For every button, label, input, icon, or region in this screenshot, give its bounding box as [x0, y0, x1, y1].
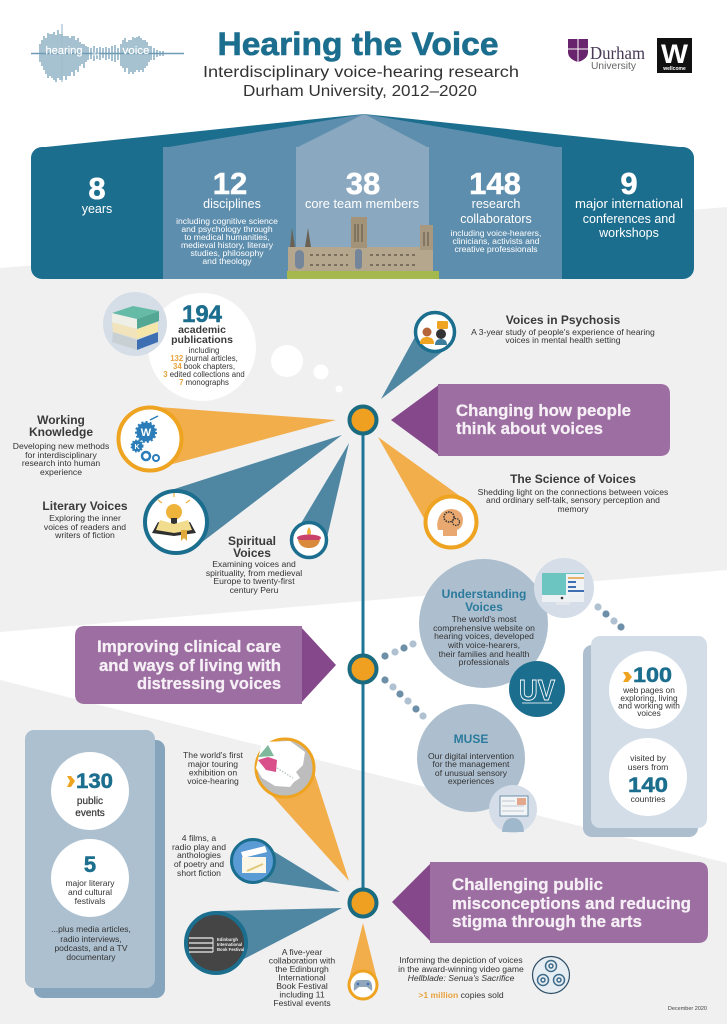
logo: hearing the voice waveform: voice: [122, 45, 150, 57]
panel: public events: 130: [76, 770, 113, 793]
banner: Challenging public misconceptions: misconceptions and reducing: [452, 895, 691, 913]
text: Literary Voices: writers of fiction: [54, 530, 115, 540]
panel: web statistics: web pages on: [622, 685, 675, 695]
beam and icon: Edinburgh International Book Festival: International: [217, 942, 242, 947]
text: Hellblade video game: Hellblade: Senua's Sacrifice: [408, 973, 515, 983]
stat: 12 disciplines: 12: [213, 166, 247, 201]
panel: MUSE: MUSE: [454, 732, 488, 746]
text: Spiritual Voices: Voices: [233, 546, 271, 560]
text: Working Knowledge: research into human: [22, 458, 100, 468]
text: Spiritual Voices: Europe to twenty-first: [213, 576, 295, 586]
text: Edinburgh collaboration: [269, 947, 335, 1008]
beam and icon: films: [232, 840, 340, 892]
panel: public events: festivals: [75, 896, 105, 906]
text: Spiritual Voices: Examining voices and: [212, 559, 296, 569]
icon: MUSE tablet: [489, 785, 537, 833]
panel: Understanding Voices: with voice-hearers,: [447, 640, 520, 650]
date note: December 2020: [668, 1006, 707, 1012]
stat: 9 conferences: 9: [620, 166, 638, 201]
text: Hellblade video game: [398, 955, 524, 1000]
text: Hellblade video game: >1 million copies sold: [418, 990, 504, 1000]
text: The Science of Voices: Shedding light on the connections between voices: [478, 487, 668, 497]
stat: 12 disciplines: to medical humanities,: [184, 232, 270, 242]
stat: 8 years: [82, 171, 112, 216]
text: The Science of Voices: and ordinary self-talk, sensory perception and: [486, 495, 660, 505]
panel: public events: [25, 730, 165, 998]
stat: 38 core team members: core team members: [305, 197, 419, 211]
beam and icon: Edinburgh International Book Festival: Edinburgh: [217, 937, 238, 942]
stat: 12 disciplines: [176, 166, 278, 266]
timeline spine: [362, 420, 364, 905]
subtitle: [203, 64, 519, 100]
stat: 148 research collaborators: [451, 166, 541, 254]
panel: public events: events: [75, 808, 105, 819]
text: touring exhibition: [183, 750, 244, 786]
stat: 148 research collaborators: research: [472, 197, 520, 211]
panel: web statistics: 100: [633, 664, 672, 687]
panel: web statistics: voices: [637, 708, 661, 718]
stat: 148 research collaborators: 148: [469, 166, 521, 201]
beam and icon: touring exhibition: [256, 739, 349, 881]
panel: public events: podcasts, and a TV: [54, 943, 128, 953]
icon: Hellblade triskele: [532, 956, 570, 994]
panel: web statistics: [583, 636, 707, 837]
text: Voices in Psychosis: Voices in Psychosis: [506, 313, 621, 327]
panel: web statistics: visited by: [630, 753, 667, 763]
beam and icon: Working Knowledge: W: [141, 427, 152, 439]
panel: public events: major literary: [65, 878, 115, 888]
stat: 9 conferences: major international: [575, 197, 683, 211]
stat: 38 core team members: [305, 166, 419, 211]
beam and icon: Working Knowledge: [118, 407, 336, 470]
panel: public events: ...plus media articles,: [51, 924, 131, 934]
text: films: anthologies: [177, 850, 221, 860]
beam and icon: The Science of Voices: [378, 437, 476, 548]
panel: Understanding Voices: professionals: [459, 657, 509, 667]
banner: Changing how people think about voices: think about voices: [456, 420, 603, 438]
stat: 38 core team members: 38: [346, 166, 380, 201]
subtitle: Interdisciplinary voice-hearing research: [203, 64, 519, 81]
banner: Challenging public misconceptions: stigma through the arts: [452, 913, 642, 931]
text: The Science of Voices: [478, 472, 668, 514]
icon: UV logo: UV: [519, 675, 556, 707]
logo: hearing the voice waveform: the: [93, 52, 100, 58]
text: Spiritual Voices: Spiritual: [228, 534, 276, 548]
text: Literary Voices: [42, 499, 128, 540]
beam and icon: Spiritual Voices: [292, 443, 349, 558]
panel: MUSE: for the management: [433, 759, 510, 769]
banner: Improving clinical care: Improving clinical care: [97, 638, 281, 656]
text: Voices in Psychosis: voices in mental health setting: [505, 335, 621, 345]
title: Hearing the Voice: [218, 26, 498, 62]
stat: 148 research collaborators: including voice-hearers,: [451, 228, 541, 238]
stat: 9 conferences: [575, 166, 683, 240]
panel: MUSE: Our digital intervention: [428, 751, 514, 761]
publications thought bubble: [103, 292, 342, 401]
logo: Durham University: University: [591, 60, 637, 72]
text: The Science of Voices: The Science of Voices: [510, 472, 636, 486]
text: films: radio play and: [172, 842, 226, 852]
text: Edinburgh collaboration: A five-year: [282, 947, 322, 957]
text: Voices in Psychosis: A 3-year study of people's experience of hearing: [471, 327, 655, 337]
stat: 148 research collaborators: collaborators: [460, 212, 532, 226]
banner: Improving clinical care: [75, 626, 336, 704]
panel: web statistics: users from: [628, 762, 668, 772]
text: films: of poetry and: [174, 859, 224, 869]
panel: Understanding Voices: Understanding: [442, 587, 526, 601]
text: touring exhibition: voice-hearing: [187, 776, 239, 786]
publications thought bubble: publications: [171, 334, 233, 346]
stat: 12 disciplines: medieval history, literary: [181, 240, 274, 250]
panel: MUSE: [417, 704, 525, 812]
text: Edinburgh collaboration: Festival events: [273, 998, 331, 1008]
publications thought bubble: 194: [182, 301, 223, 328]
text: Edinburgh collaboration: including 11: [279, 990, 325, 1000]
logo: Wellcome: W: [661, 39, 689, 69]
text: Working Knowledge: for interdisciplinary: [25, 450, 98, 460]
logo: hearing the voice waveform: hearing: [46, 45, 82, 57]
dotted connector: to Understanding Voices: [381, 640, 417, 660]
panel: public events: radio interviews,: [60, 934, 122, 944]
text: Working Knowledge: Knowledge: [29, 425, 93, 439]
text: The Science of Voices: memory: [557, 504, 589, 514]
panel: Understanding Voices: their families and health: [439, 649, 530, 659]
text: Working Knowledge: Working: [37, 413, 85, 427]
panel: web statistics: 140: [628, 774, 668, 797]
panel: web statistics: and working with: [618, 700, 680, 710]
stat: 12 disciplines: studies, philosophy: [190, 248, 264, 258]
logo: Durham University: [568, 39, 645, 72]
panel: MUSE: experiences: [448, 776, 494, 786]
stat: 12 disciplines: disciplines: [203, 197, 261, 211]
text: Voices in Psychosis: [471, 313, 655, 345]
text: touring exhibition: The world's first: [183, 750, 244, 760]
icon: stack of books: [112, 306, 159, 350]
text: Edinburgh collaboration: collaboration with: [269, 956, 335, 966]
banner: Changing how people think about voices: Changing how people: [456, 402, 631, 420]
stat: 8 years: 8: [88, 171, 106, 206]
panel: public events: documentary: [66, 952, 116, 962]
icon: website monitor: [534, 558, 594, 618]
panel: public events: and cultural: [68, 887, 112, 897]
text: films: [172, 833, 226, 878]
publications thought bubble: 7 monographs: [179, 378, 229, 387]
publications thought bubble: 3 edited collections and: [163, 370, 245, 379]
banner: Challenging public misconceptions: [392, 862, 708, 943]
publications thought bubble: academic: [178, 324, 226, 336]
banner: Changing how people think about voices: [391, 384, 670, 456]
text: Hellblade video game: Informing the depiction of voices: [399, 955, 523, 965]
illustration: Durham Cathedral: [287, 217, 439, 279]
node: timeline middle: [350, 656, 376, 682]
text: Edinburgh collaboration: the Edinburgh: [275, 964, 329, 974]
publications thought bubble: 34 book chapters,: [173, 362, 235, 371]
stat: 148 research collaborators: creative professionals: [454, 244, 538, 254]
text: films: 4 films, a: [182, 833, 216, 843]
subtitle: Durham University, 2012–2020: [243, 83, 477, 100]
dotted connector: to MUSE: [381, 676, 427, 720]
stat: 12 disciplines: and theology: [202, 256, 252, 266]
text: films: short fiction: [177, 868, 221, 878]
panel: Understanding Voices: comprehensive website on: [433, 623, 535, 633]
text: Spiritual Voices: spirituality, from medieval: [206, 568, 302, 578]
panel: public events: public: [77, 796, 103, 807]
node: timeline top: [350, 406, 376, 434]
panel: Understanding Voices: Voices: [465, 600, 503, 614]
logo: hearing the voice waveform: [31, 24, 184, 82]
text: Literary Voices: voices of readers and: [44, 522, 126, 532]
stat: 9 conferences: workshops: [598, 226, 659, 240]
banner: Improving clinical care: and ways of living with: [99, 657, 281, 675]
panel: public events: 5: [84, 852, 96, 877]
beam and icon: video game: [349, 923, 377, 999]
panel: Understanding Voices: [419, 559, 548, 688]
text: touring exhibition: major touring: [188, 759, 238, 769]
text: Literary Voices: Exploring the inner: [49, 513, 121, 523]
beam and icon: Literary Voices: [145, 435, 342, 553]
text: Edinburgh collaboration: Book Festival: [276, 981, 328, 991]
beam and icon: Edinburgh International Book Festival: Book Festival: [217, 947, 244, 952]
text: Working Knowledge: experience: [40, 467, 82, 477]
icon: UV logo: [509, 661, 565, 717]
stat: 148 research collaborators: clinicians, activists and: [453, 236, 540, 246]
text: Literary Voices: Literary Voices: [42, 499, 128, 513]
panel: headline statistics banner: [31, 114, 694, 279]
text: Working Knowledge: [13, 413, 109, 477]
text: Edinburgh collaboration: International: [278, 972, 326, 982]
text: Spiritual Voices: [206, 534, 302, 595]
node: timeline bottom: [350, 890, 376, 916]
stat: 8 years: years: [82, 202, 112, 216]
logo: Wellcome: wellcome: [662, 66, 686, 72]
panel: Understanding Voices: hearing voices, developed: [434, 631, 534, 641]
panel: Understanding Voices: The world's most: [452, 614, 517, 624]
panel: web statistics: countries: [631, 794, 665, 804]
stat: 12 disciplines: and psychology through: [181, 224, 273, 234]
panel: MUSE: of unusual sensory: [435, 768, 508, 778]
stat: 12 disciplines: including cognitive science: [176, 216, 278, 226]
logo: Durham University: Durham: [590, 43, 645, 63]
beam and icon: Working Knowledge: K: [134, 444, 140, 451]
publications thought bubble: 132 journal articles,: [170, 354, 238, 363]
dotted connector: monitor to web stats: [594, 603, 625, 631]
stat: 9 conferences: conferences and: [583, 212, 675, 226]
publications thought bubble: including: [189, 346, 219, 355]
beam and icon: Edinburgh International Book Festival: [186, 908, 342, 973]
text: Working Knowledge: Developing new methods: [13, 441, 109, 451]
text: touring exhibition: exhibition on: [189, 768, 237, 778]
text: Spiritual Voices: century Peru: [230, 585, 279, 595]
panel: web statistics: exploring, living: [620, 693, 678, 703]
banner: Improving clinical care: distressing voices: [137, 675, 281, 693]
text: Hellblade video game: in the award-winning video game: [398, 964, 524, 974]
banner: Challenging public misconceptions: Challenging public: [452, 876, 603, 894]
beam and icon: Voices in Psychosis: [381, 312, 454, 399]
logo: Wellcome: [657, 38, 692, 73]
